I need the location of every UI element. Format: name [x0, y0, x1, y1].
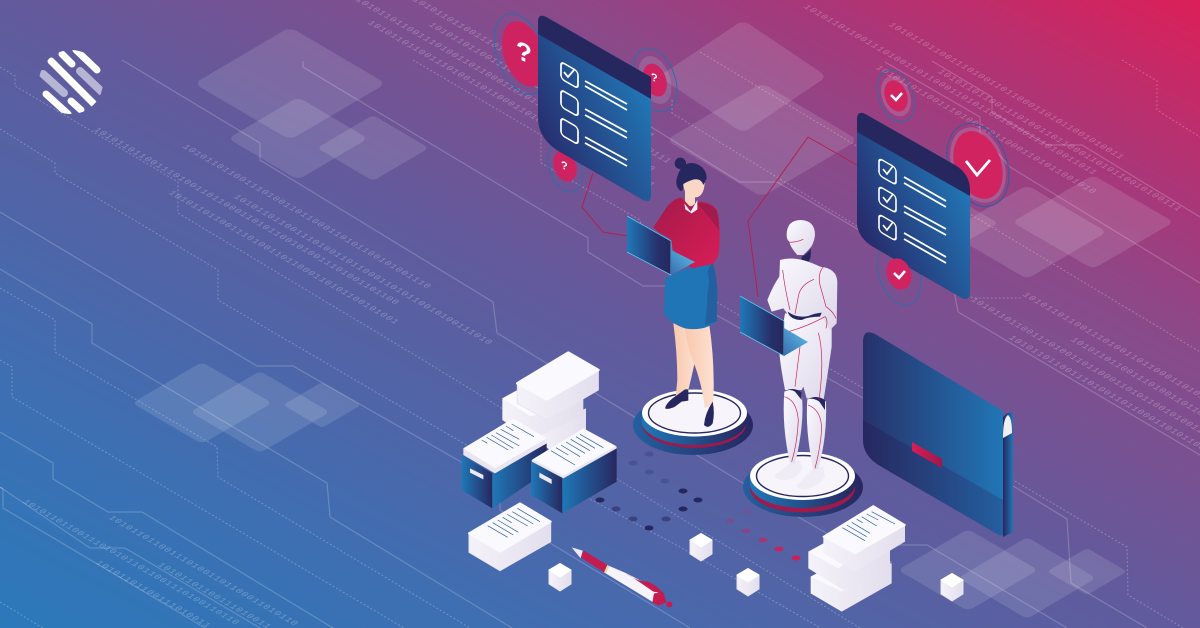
binary code rows: 10101101100111010011011000110101100101001110100110110	[352, 0, 657, 173]
red connector wires	[582, 137, 857, 297]
binary code rows: 10101101100111010011011000110101100101001	[165, 189, 401, 326]
robot laptop	[740, 296, 808, 356]
question badges behind checklist	[484, 6, 685, 197]
logo	[43, 50, 102, 114]
binary code rows: 101011011001110100110110001101011001010011101001101100	[90, 126, 401, 306]
cubes	[549, 534, 963, 601]
binary code rows: 1010110110011101001101100011010110	[105, 514, 300, 627]
panel: completed checklist	[857, 113, 970, 299]
binary code rows: 10101101100111010011	[92, 559, 213, 628]
binary code rows: 1010110110011101001101100011010110010100111	[934, 68, 1184, 213]
dot trails	[596, 452, 800, 560]
question marks: ?	[516, 35, 532, 70]
binary code rows: 1010110110011101001101100011010110010100111	[425, 21, 673, 165]
pen	[572, 547, 672, 607]
binary code rows: 1010110110011101001101100011010110010100111	[409, 0, 657, 140]
paper stack right	[808, 506, 905, 612]
question marks: ?	[561, 159, 568, 174]
panel: question checklist	[538, 16, 651, 201]
robot	[767, 220, 837, 489]
check badge front and tick marks	[882, 93, 990, 293]
paper stacks and archive boxes	[462, 353, 672, 607]
binary code rows: 101011011001110100110110001101011001010	[872, 64, 1098, 195]
woman laptop	[627, 216, 695, 275]
binary code rows: 101011011001110100110110001101011001010011	[885, 21, 1126, 161]
check badges behind results panel	[869, 65, 1020, 311]
woman	[653, 158, 720, 427]
woman platform	[633, 390, 753, 455]
folder	[863, 332, 1013, 537]
binary code rows: 101011011001110	[19, 498, 109, 550]
binary code rows: 10101101100111010011	[154, 561, 273, 628]
paper stack front	[469, 503, 551, 571]
binary code rows: 1010110110011101001101100011010110010100111010011011	[800, 3, 1099, 176]
binary code rows: 101011011001110100110110001101011001010011	[967, 296, 1200, 435]
archive box right	[531, 428, 617, 513]
archive box left	[462, 418, 547, 508]
question marks: ?	[651, 71, 658, 86]
binary code rows: 10101101100111010011011000110101100101001110	[179, 143, 433, 290]
binary code rows: 101011011001110100110110001101011001010011101001101	[364, 19, 657, 189]
robot platform	[743, 452, 863, 517]
question marks	[516, 35, 658, 174]
binary code rows: 101011011001110100110110	[100, 544, 242, 626]
binary code rows: 1010110110011101001101100011010110010100111010	[230, 193, 495, 346]
